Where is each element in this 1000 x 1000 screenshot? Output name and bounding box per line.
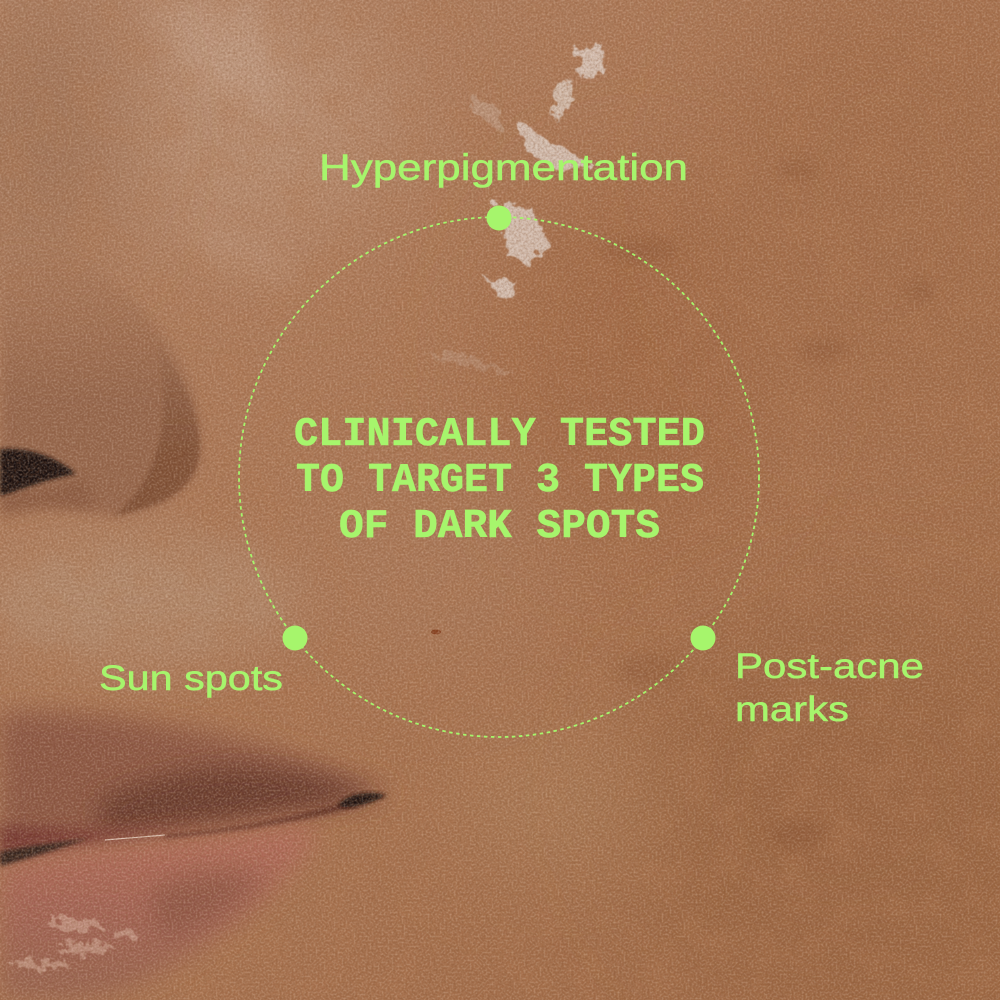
label: hyperpigmentation: Hyperpigmentation <box>319 147 688 188</box>
label: sun spots: Sun spots <box>99 659 283 698</box>
upper lip <box>0 711 392 862</box>
headline: OF DARK SPOTS <box>339 504 660 550</box>
headline: CLINICALLY TESTED <box>294 412 705 458</box>
headline: TO TARGET 3 TYPES <box>296 458 704 504</box>
lower lip <box>0 827 318 1000</box>
nose <box>0 240 200 518</box>
dark spots on cheek <box>602 160 936 849</box>
nostril <box>0 449 76 496</box>
soft sheen on upper cheek <box>140 0 290 290</box>
label: post-acne marks: marks <box>735 690 849 729</box>
marker: hyperpigmentation <box>486 206 512 230</box>
label: post-acne marks: Post-acne <box>735 647 924 686</box>
headline <box>294 412 705 550</box>
dotted circle connecting spot types <box>239 217 759 737</box>
lip parting line <box>0 838 90 866</box>
lip gloss <box>10 919 137 969</box>
marker: post-acne marks <box>690 626 716 650</box>
lips <box>0 711 392 1000</box>
specular highlight on cheek <box>415 44 606 375</box>
label: post-acne marks <box>735 647 924 729</box>
marker: sun spots <box>282 626 308 650</box>
